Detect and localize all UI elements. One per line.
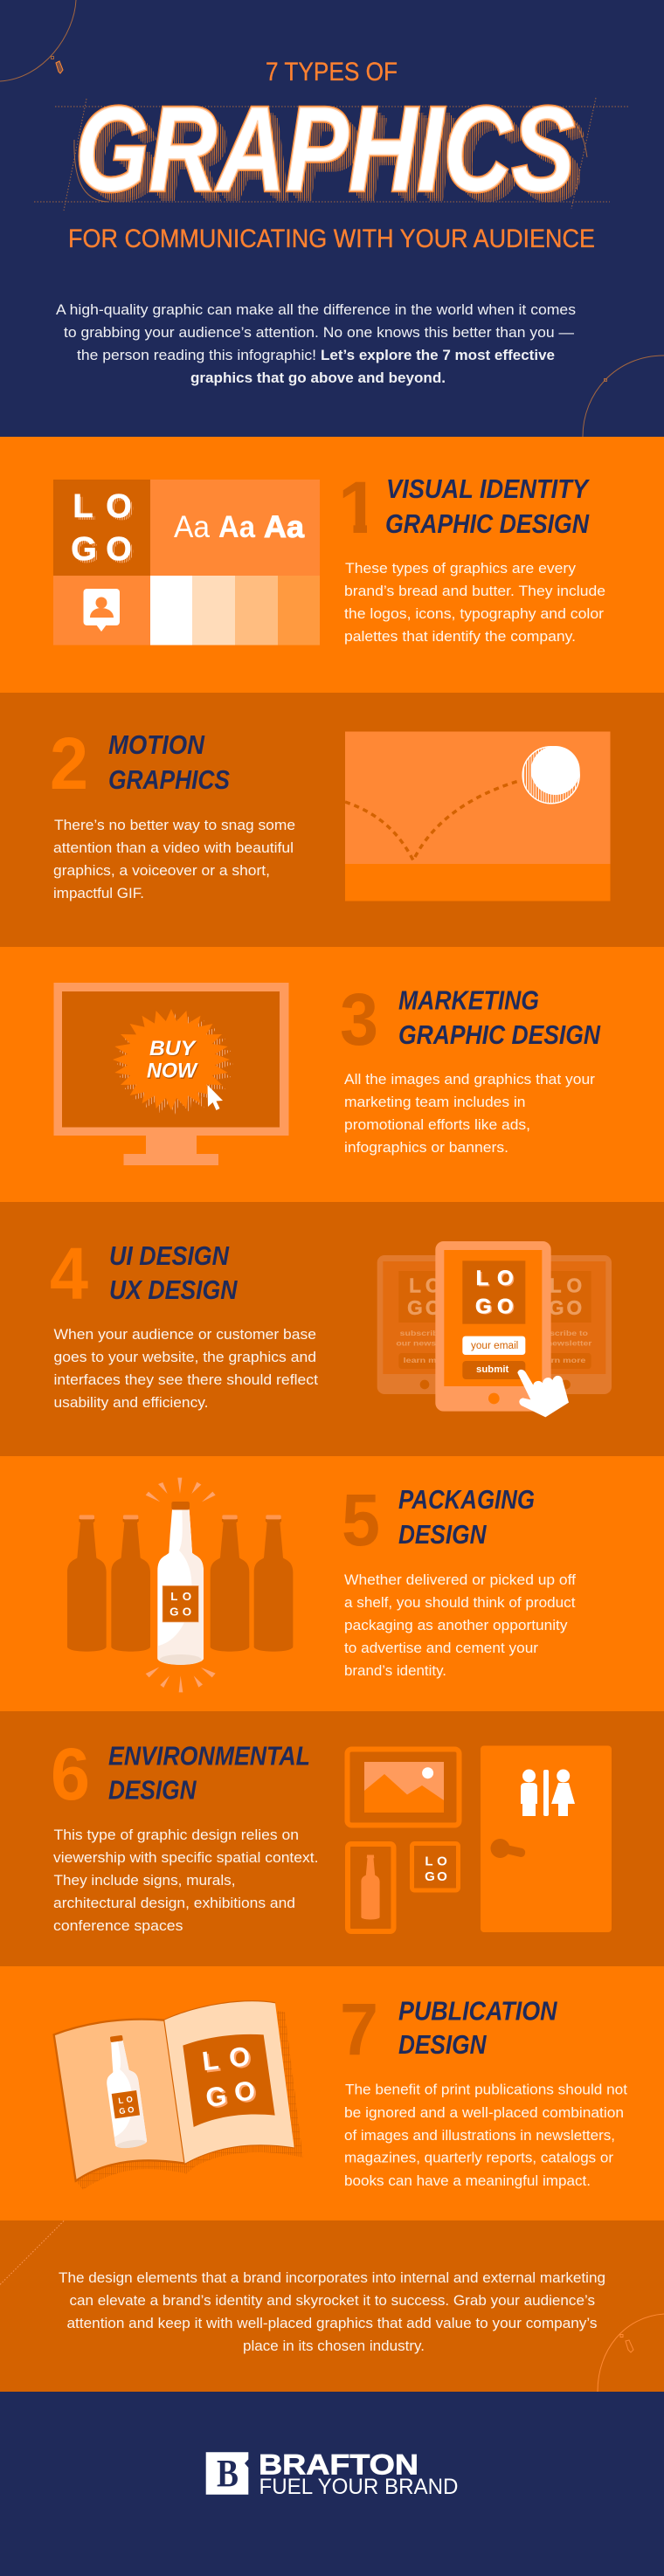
right tablet: our newsletter — [529, 1338, 592, 1347]
heading 4: UI DESIGN — [109, 1240, 230, 1271]
left tablet: L — [409, 1274, 421, 1296]
center tablet: G — [477, 1296, 493, 1320]
illustration: framed landscape — [348, 1749, 460, 1826]
left tablet: G — [407, 1296, 423, 1319]
heading 2: GRAPHICS — [108, 764, 230, 795]
heading 6: DESIGN — [108, 1775, 197, 1805]
subtitle: FOR COMMUNICATING WITH YOUR AUDIENCE — [68, 224, 595, 253]
center tablet: your email — [471, 1339, 518, 1351]
heading 3: GRAPHIC DESIGN — [398, 1019, 601, 1050]
left tablet: learn more — [404, 1356, 452, 1364]
left tablet: O — [425, 1274, 440, 1296]
right tablet: L — [550, 1274, 562, 1296]
heading 1 — [385, 473, 591, 539]
logo lettering: G — [73, 534, 100, 570]
body text 2: graphics, a voiceover or a short, — [53, 862, 270, 879]
illustration: framed logo: G — [425, 1869, 435, 1884]
body text 3: promotional efforts like ads, — [344, 1116, 530, 1133]
logo block: O — [227, 2041, 252, 2074]
typography samples: Aa — [174, 510, 211, 544]
right tablet: O — [567, 1296, 582, 1319]
wordmark: BRAFTON — [259, 2448, 418, 2480]
body text 4: When your audience or customer base — [54, 1326, 316, 1343]
dark bottles — [67, 1519, 293, 1652]
right tablet: subscribe to — [533, 1329, 588, 1337]
body text 5: packaging as another opportunity — [344, 1617, 568, 1633]
logo block: L — [200, 2045, 220, 2076]
illustration: framed logo: O — [437, 1869, 447, 1884]
body text 1: the logos, icons, typography and color — [344, 605, 604, 622]
heading 3: MARKETING — [398, 985, 539, 1015]
heading 1: GRAPHIC DESIGN — [385, 508, 590, 539]
logo block: G — [204, 2081, 228, 2113]
body text 5 — [344, 1571, 576, 1679]
logo lettering: O — [106, 531, 132, 568]
body text 7: magazines, quarterly reports, catalogs or — [344, 2149, 613, 2166]
logo block: G — [206, 2082, 231, 2115]
bottle label: O — [183, 1590, 191, 1603]
heading 2 — [108, 729, 230, 795]
panel: 4 UI UX design — [50, 1233, 612, 1417]
icon: pointing hand — [517, 1370, 569, 1417]
logo lettering: O — [108, 534, 135, 570]
icon: woman — [551, 1770, 575, 1816]
closing text — [59, 2269, 605, 2354]
hatched shadow — [76, 2011, 303, 2190]
illustration: open magazine — [54, 2001, 303, 2190]
heading 1: VISUAL IDENTITY — [386, 473, 591, 504]
divider — [543, 1770, 549, 1816]
tilted bottle — [100, 2034, 148, 2150]
illustration: framed logo: L — [425, 1854, 433, 1869]
heading 5 — [398, 1484, 535, 1550]
footer: Brafton logo — [206, 2448, 458, 2499]
center tablet: O — [497, 1295, 514, 1318]
body text 3: marketing team includes in — [344, 1094, 526, 1110]
panel: 1 visual identity — [53, 466, 605, 645]
logo lettering: L — [75, 491, 96, 528]
typography samples: Aa — [218, 510, 255, 544]
bottle caps — [80, 1515, 281, 1519]
right tablet: G — [549, 1296, 564, 1319]
panel: 5 packaging design — [67, 1478, 576, 1692]
closing text: place in its chosen industry. — [243, 2338, 425, 2354]
tilted bottle: O — [126, 2095, 133, 2104]
tilted bottle: L — [118, 2096, 124, 2105]
icon: door handle — [491, 1839, 525, 1858]
left page — [54, 2020, 185, 2181]
body text 7: books can have a meaningful impact. — [344, 2172, 591, 2189]
heading 4: UX DESIGN — [109, 1274, 238, 1305]
right tablet: learn more — [538, 1356, 586, 1364]
number 1: 1 — [338, 466, 379, 549]
illustration: tablets with signup form — [377, 1241, 612, 1417]
heading 7 — [398, 1995, 557, 2060]
rays — [146, 1478, 216, 1692]
logo block — [183, 2034, 275, 2127]
body text 1 — [344, 560, 605, 645]
heading: 7 types of: 7 TYPES OF — [266, 58, 398, 86]
center tablet: submit — [476, 1364, 509, 1375]
body text 2: impactful GIF. — [53, 885, 144, 901]
center tablet: O — [499, 1267, 515, 1291]
panel: header background — [0, 0, 664, 437]
illustration: bouncing ball — [345, 732, 610, 901]
panel: 2 motion graphics — [50, 722, 610, 901]
body text 4: interfaces they see there should reflect — [54, 1371, 318, 1388]
illustration: restroom door — [481, 1745, 612, 1932]
body text 6: They include signs, murals, — [54, 1872, 236, 1889]
body text 7: The benefit of print publications should not — [345, 2081, 627, 2098]
illustration: bottles — [67, 1478, 293, 1692]
panel: 3 marketing graphic design — [54, 978, 601, 1165]
heading 6: ENVIRONMENTAL — [108, 1740, 310, 1771]
heading 7: PUBLICATION — [398, 1995, 557, 2027]
heading 5: PACKAGING — [398, 1484, 535, 1515]
decoration: dashed guide — [0, 2220, 64, 2285]
center tablet: G — [475, 1295, 492, 1318]
heading 6 — [108, 1740, 310, 1805]
icon: profile pin — [84, 589, 120, 632]
center tablet: L — [476, 1267, 488, 1290]
logo lettering — [71, 488, 135, 570]
right tablet: O — [567, 1274, 582, 1296]
closing text: The design elements that a brand incorporates into internal and external marketing — [59, 2269, 605, 2286]
logo lettering: O — [106, 488, 132, 525]
body text 1: brand’s bread and butter. They include — [344, 583, 605, 599]
intro text block: Let’s explore the 7 most effective — [321, 347, 555, 363]
number 3: 3 — [340, 978, 378, 1060]
body text 4: goes to your website, the graphics and — [54, 1349, 316, 1365]
body text 3: All the images and graphics that your — [344, 1071, 595, 1088]
body text 7: of images and illustrations in newsletters, — [344, 2127, 615, 2144]
body text 6: viewership with specific spatial context. — [53, 1849, 318, 1866]
bottle label: G — [169, 1606, 179, 1619]
illustration: framed logo — [412, 1843, 458, 1890]
logo mark — [206, 2452, 248, 2495]
number 4: 4 — [50, 1233, 88, 1315]
tilted bottle: O — [128, 2105, 135, 2115]
icon: cursor — [208, 1085, 223, 1110]
number 7: 7 — [340, 1988, 378, 2070]
typography samples: Aa — [264, 510, 305, 544]
illustration: brand kit grid — [53, 480, 320, 645]
logo block: O — [232, 2075, 257, 2108]
center tablet — [435, 1241, 551, 1412]
logo block: O — [234, 2077, 259, 2110]
left tablet — [377, 1255, 478, 1394]
closing text: attention and keep it with well-placed graphics that add value to your company’s — [66, 2315, 598, 2331]
number 2: 2 — [50, 722, 88, 805]
body text 2: attention than a video with beautiful — [53, 839, 294, 856]
logo mark: B — [217, 2452, 239, 2495]
illustration: framed logo: O — [437, 1854, 447, 1869]
right tablet — [511, 1255, 612, 1394]
panel: 7 publication design — [54, 1988, 627, 2190]
illustration: monitor with buy-now badge: BUY — [150, 1038, 197, 1061]
intro text block: to grabbing your audience’s attention. No one knows this better than you — — [64, 324, 574, 341]
heading 7: DESIGN — [398, 2029, 487, 2060]
body text 6: architectural design, exhibitions and — [53, 1895, 295, 1911]
body text 6 — [53, 1827, 318, 1934]
center tablet: L — [477, 1267, 490, 1291]
decoration: arc with pen tool — [598, 2314, 664, 2392]
tagline: FUEL YOUR BRAND — [259, 2475, 458, 2499]
number 6: 6 — [51, 1733, 90, 1815]
center tablet: O — [497, 1267, 514, 1290]
body text 7 — [344, 2081, 627, 2189]
intro text block: A high-quality graphic can make all the difference in the world when it comes — [56, 301, 576, 318]
right page edges — [164, 2001, 294, 2164]
white bottle — [157, 1502, 204, 1665]
illustration: monitor with buy-now badge: BUY — [149, 1037, 197, 1060]
typography samples — [174, 510, 305, 544]
body text 4 — [54, 1326, 318, 1411]
body text 2: There’s no better way to snag some — [54, 817, 295, 833]
body text 5: Whether delivered or picked up off — [344, 1571, 576, 1588]
body text 3: infographics or banners. — [344, 1139, 508, 1156]
body text 6: conference spaces — [53, 1917, 183, 1934]
logo lettering: O — [108, 491, 135, 528]
illustration: framed bottle — [348, 1844, 393, 1931]
bottle label: O — [183, 1606, 191, 1619]
intro text block: graphics that go above and beyond. — [190, 369, 446, 386]
tilted bottle: G — [119, 2106, 126, 2116]
body text 5: a shelf, you should think of product — [344, 1594, 576, 1611]
icon: man — [521, 1770, 537, 1816]
decoration: top-left bezier arc with pen tool — [0, 0, 76, 81]
logo lettering: G — [71, 531, 97, 568]
illustration: monitor with buy-now badge — [54, 983, 288, 1165]
logo lettering: L — [73, 488, 93, 525]
heading 5: DESIGN — [398, 1519, 487, 1550]
left tablet: our newsletter — [396, 1338, 459, 1347]
center tablet: O — [499, 1296, 515, 1320]
body text 6: This type of graphic design relies on — [54, 1827, 299, 1843]
body text 2 — [53, 817, 295, 901]
illustration: monitor with buy-now badge: NOW — [147, 1059, 198, 1083]
number 5: 5 — [342, 1479, 380, 1561]
closing text: can elevate a brand’s identity and skyrocket it to success. Grab your audience’s — [70, 2292, 595, 2309]
intro text block: the person reading this infographic! — [77, 347, 316, 363]
illustration: monitor with buy-now badge: NOW — [148, 1060, 199, 1084]
body text 1: palettes that identify the company. — [344, 628, 576, 645]
bottle label: L — [170, 1590, 177, 1603]
panel: closing statement — [0, 2220, 664, 2392]
decoration: bottom-right bezier arc — [583, 356, 664, 437]
body text 5: brand’s identity. — [344, 1662, 446, 1679]
body text 1: These types of graphics are every — [345, 560, 577, 577]
body text 3 — [344, 1071, 595, 1156]
bottle label — [163, 1585, 198, 1622]
logo block: L — [203, 2048, 222, 2079]
logo block: O — [229, 2043, 253, 2075]
body text 4: usability and efficiency. — [54, 1394, 209, 1411]
left tablet: subscribe to — [400, 1329, 454, 1337]
body text 5: to advertise and cement your — [344, 1640, 538, 1656]
heading 2: MOTION — [108, 729, 205, 760]
intro text block — [56, 301, 576, 386]
panel: 6 environmental design — [51, 1733, 612, 1934]
heading 3 — [398, 985, 601, 1050]
heading 4 — [109, 1240, 238, 1305]
right page — [164, 2001, 294, 2164]
body text 7: be ignored and a well-placed combination — [344, 2104, 624, 2121]
left tablet: O — [425, 1296, 440, 1319]
